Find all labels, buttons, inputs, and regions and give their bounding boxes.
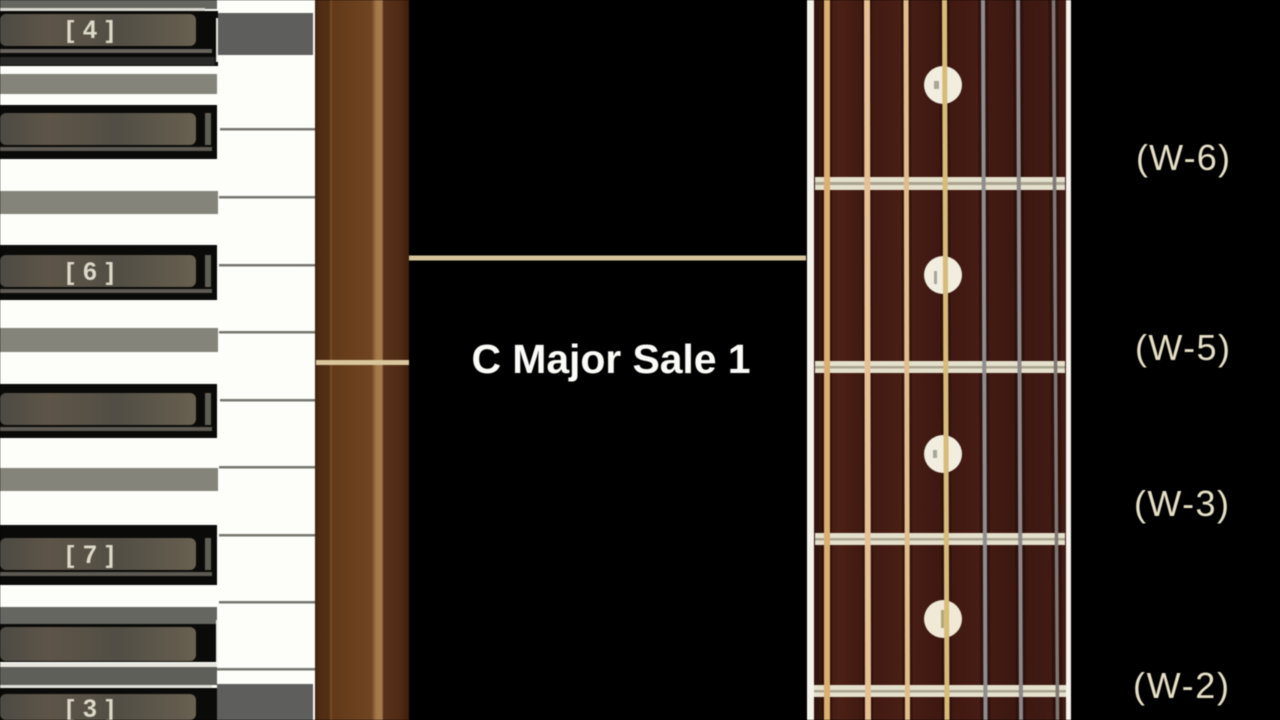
label: W-3: (W-3) bbox=[1134, 483, 1229, 524]
strings bbox=[827, 0, 1058, 720]
panel: wooden divider bbox=[315, 0, 409, 720]
white key separators bbox=[217, 128, 315, 670]
label: W-5: (W-5) bbox=[1135, 327, 1230, 368]
black key 2nd bbox=[0, 105, 217, 159]
left binding bbox=[807, 0, 814, 720]
fret marker 1 bbox=[924, 66, 962, 104]
right binding bbox=[1066, 0, 1071, 720]
fret 4 bbox=[814, 685, 1066, 697]
tan inlay bbox=[316, 360, 409, 365]
title: C Major Sale 1 bbox=[472, 336, 750, 382]
black key 6 bbox=[0, 245, 217, 300]
lower right grey key bbox=[217, 684, 313, 720]
black key 7 bbox=[0, 525, 217, 585]
fret marker 4 bbox=[924, 600, 962, 638]
horizontal tan divider bbox=[409, 256, 806, 260]
fret 2 bbox=[815, 361, 1065, 373]
fret marker 3 bbox=[924, 435, 962, 473]
panel: guitar fretboard bbox=[807, 0, 1071, 720]
panel: piano keyboard bbox=[0, 0, 315, 720]
label: W-2: (W-2) bbox=[1133, 665, 1229, 706]
black key 6th bbox=[0, 607, 218, 688]
black key 7: [7] bbox=[66, 541, 114, 569]
black key 6: [6] bbox=[66, 258, 114, 286]
fret 3 bbox=[815, 533, 1065, 545]
label: W-6: (W-6) bbox=[1136, 137, 1230, 178]
black key 4th bbox=[0, 384, 217, 438]
fretboard wood bbox=[814, 0, 1066, 720]
black key 3 bbox=[0, 688, 217, 720]
grey key strips bbox=[0, 74, 218, 491]
string shadows bbox=[827, 0, 1058, 720]
black key 4 bbox=[0, 8, 218, 66]
black key 4: [4] bbox=[66, 16, 114, 44]
fret marker 2 bbox=[924, 256, 962, 294]
upper right grey key bbox=[218, 13, 313, 55]
top grey strip bbox=[0, 0, 217, 9]
fret 1 bbox=[815, 177, 1065, 190]
